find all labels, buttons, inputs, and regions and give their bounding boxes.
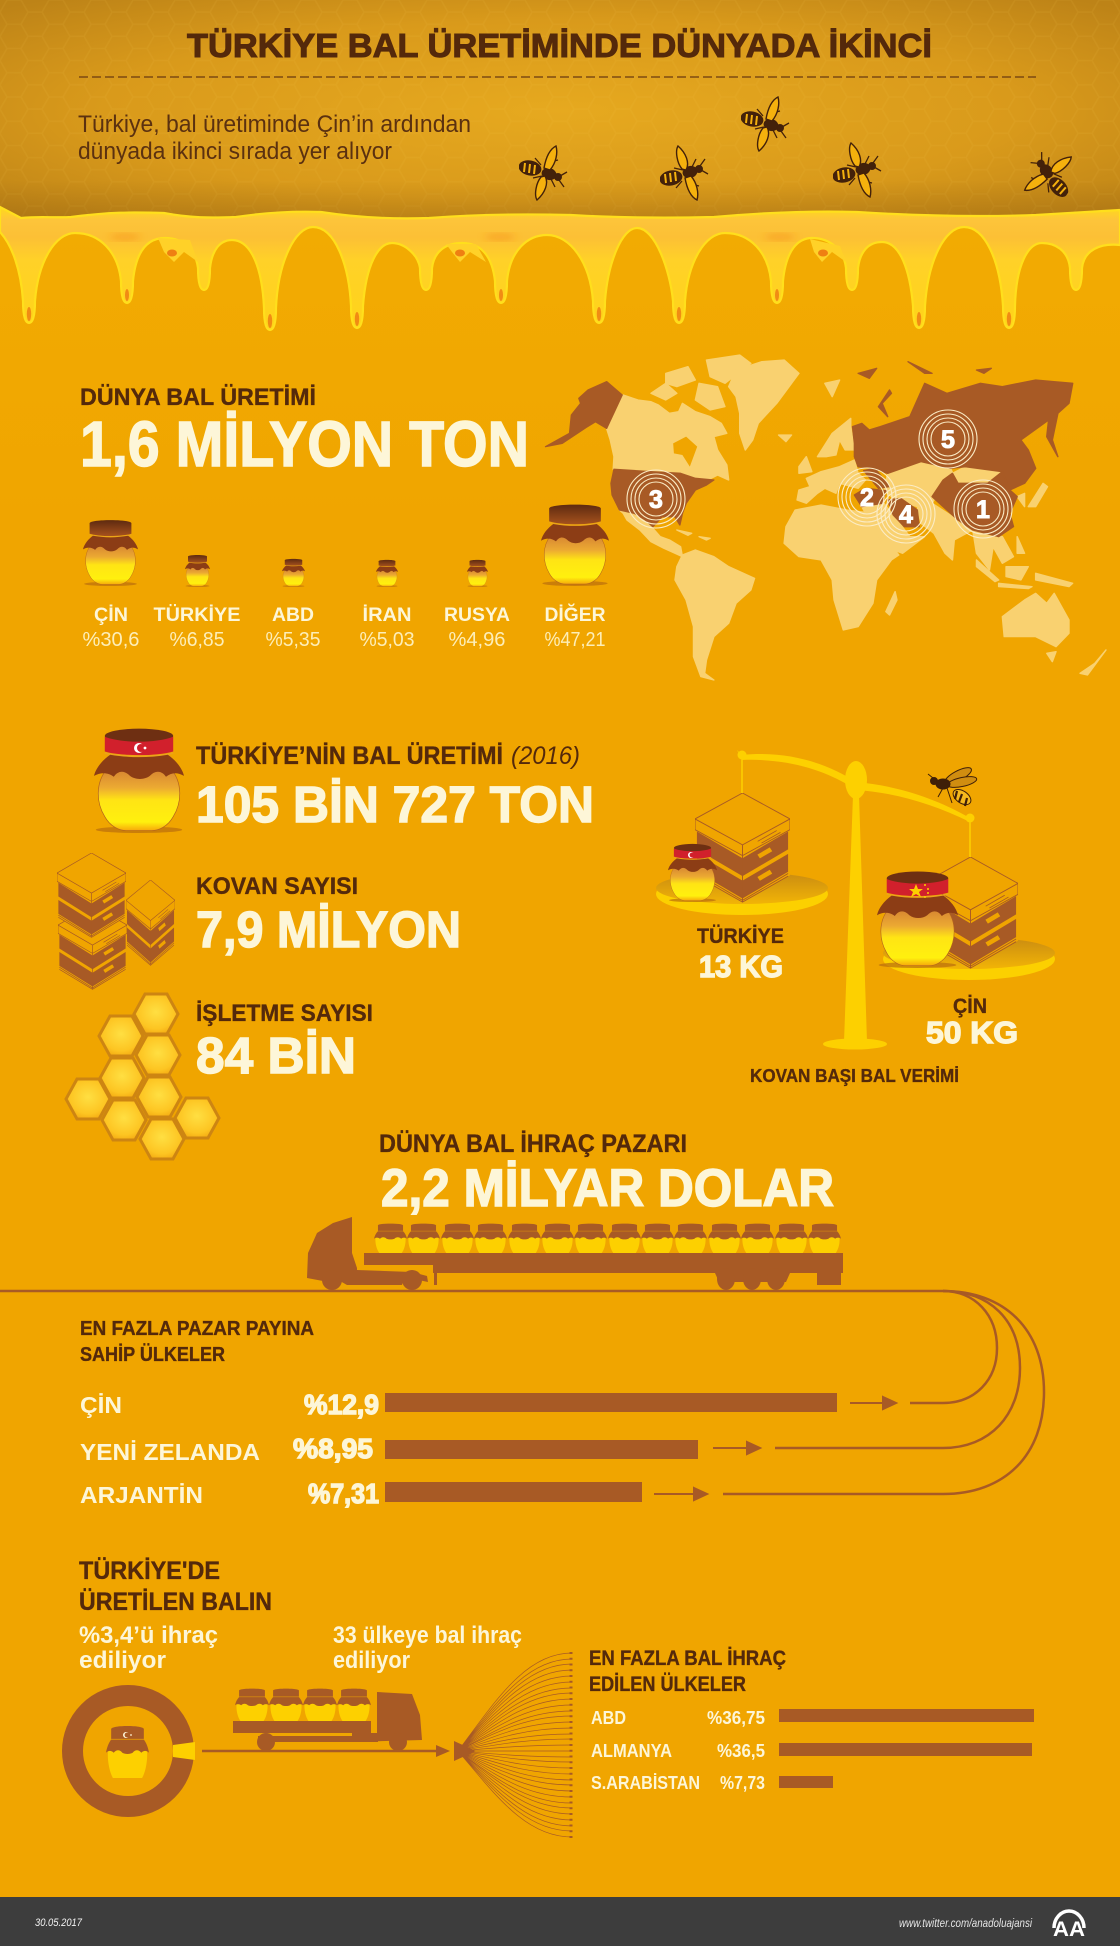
jars on trailer xyxy=(374,1224,841,1253)
arrow to fan xyxy=(202,1745,450,1757)
ring: 5 Rusya xyxy=(919,410,977,468)
balance scale xyxy=(656,750,1055,1050)
heading: Turkish honey: ÜRETİLEN BALIN xyxy=(79,1587,272,1616)
jar labels and percentages: %5,35 xyxy=(266,629,320,651)
rank numbers: 1 xyxy=(976,496,990,524)
row: Almanya: ALMANYA xyxy=(591,1741,672,1761)
callout: export share: %3,4’ü ihraç xyxy=(79,1622,218,1649)
logo: AA: AA xyxy=(1053,1918,1085,1941)
fan of export lines xyxy=(454,1652,572,1839)
callout: export share xyxy=(79,1622,218,1674)
right hive xyxy=(923,857,1018,968)
row: Yeni Zelanda xyxy=(80,1433,760,1465)
jar labels and percentages: %47,21 xyxy=(544,629,606,651)
left pan xyxy=(656,872,828,915)
row: Arjantin: ARJANTİN xyxy=(80,1482,203,1508)
Türkiye production heading: TÜRKİYE’NİN BAL ÜRETİMİ xyxy=(196,741,503,770)
row: S.Arabistan: S.ARABİSTAN xyxy=(591,1773,700,1793)
subtitle text: dünyada ikinci sırada yer alıyor xyxy=(78,138,392,165)
date: 30.05.2017 xyxy=(35,1917,83,1929)
bar chart: market share xyxy=(80,1389,896,1509)
rank numbers: 2 xyxy=(860,484,874,512)
big number: 1.6 million tons: 1,6 MİLYON TON xyxy=(80,408,529,480)
side droplets xyxy=(158,238,846,262)
scale labels: KOVAN BAŞI BAL VERİMİ xyxy=(750,1066,959,1086)
business count label: İŞLETME SAYISI xyxy=(196,1000,373,1027)
callout: 33 countries xyxy=(333,1622,522,1674)
row: Çin xyxy=(80,1389,896,1420)
heading: top market share: SAHİP ÜLKELER xyxy=(80,1343,225,1366)
bar chart: export destinations xyxy=(591,1708,1034,1793)
rank numbers xyxy=(649,426,990,529)
heading: top export destinations: EN FAZLA BAL İHRAÇ xyxy=(589,1647,786,1670)
rank numbers: 3 xyxy=(649,486,663,514)
rank numbers: 4 xyxy=(899,501,913,529)
row: ABD xyxy=(591,1708,1034,1728)
jar labels and percentages: %4,96 xyxy=(448,629,506,651)
world map xyxy=(546,355,1106,680)
right pan xyxy=(883,937,1055,980)
scale labels: 13 KG xyxy=(699,949,783,984)
jars: production share xyxy=(83,505,609,587)
icon: bee on beam xyxy=(928,765,978,808)
scale labels: 50 KG xyxy=(926,1015,1018,1050)
row: Çin: %12,9 xyxy=(304,1389,379,1420)
heading: top export destinations xyxy=(589,1647,786,1696)
row: ABD: %36,75 xyxy=(707,1708,765,1728)
scale labels: TÜRKİYE xyxy=(697,925,784,948)
callout: export share: ediliyor xyxy=(79,1647,166,1674)
row: ABD: ABD xyxy=(591,1708,626,1728)
icon: honeycomb cells xyxy=(66,994,219,1159)
heading: Turkish honey xyxy=(79,1556,272,1616)
jar labels and percentages: %30,6 xyxy=(82,629,140,651)
small truck with jars xyxy=(233,1689,422,1751)
jar labels and percentages: TÜRKİYE xyxy=(154,605,240,626)
row: S.Arabistan: %7,73 xyxy=(720,1773,765,1793)
jar labels and percentages xyxy=(82,604,606,651)
panel: header honeycomb band xyxy=(0,0,1120,222)
honey drips xyxy=(0,207,1120,330)
scale labels: ÇİN xyxy=(953,995,987,1018)
row: Arjantin: %7,31 xyxy=(308,1478,379,1509)
jar labels and percentages: %5,03 xyxy=(360,629,414,651)
hive count label: KOVAN SAYISI xyxy=(196,873,358,900)
Türkiye production heading: (2016) xyxy=(511,742,580,770)
subtitle text xyxy=(78,111,471,165)
row: S.Arabistan xyxy=(591,1773,833,1793)
orange drip tips xyxy=(27,289,1011,328)
footer xyxy=(0,1897,1120,1946)
flow lines from road to bars xyxy=(0,1291,1044,1494)
row: Yeni Zelanda: %8,95 xyxy=(293,1433,373,1464)
row: Almanya xyxy=(591,1741,1032,1761)
row: Çin: ÇİN xyxy=(80,1392,122,1418)
subtitle text: Türkiye, bal üretiminde Çin’in ardından xyxy=(78,111,471,138)
rank numbers: 5 xyxy=(941,426,955,454)
icon: Turkish jar xyxy=(94,729,184,833)
heading: Turkish honey: TÜRKİYE'DE xyxy=(79,1556,220,1585)
donut chart: export share xyxy=(72,1696,195,1806)
row: Yeni Zelanda: YENİ ZELANDA xyxy=(80,1439,260,1465)
jar labels and percentages: ABD xyxy=(272,605,314,626)
truck with jars xyxy=(307,1217,843,1290)
ring: 3 ABD xyxy=(627,470,685,528)
ring: 2 Türkiye xyxy=(838,468,896,526)
heading: world production: DÜNYA BAL ÜRETİMİ xyxy=(80,384,316,411)
row: Arjantin xyxy=(80,1478,707,1509)
big number: export market: 2,2 MİLYAR DOLAR xyxy=(381,1159,834,1218)
brown producer countries xyxy=(546,362,1073,537)
heading: top export destinations: EDİLEN ÜLKELER xyxy=(589,1673,746,1696)
jar labels and percentages: DİĞER xyxy=(544,604,606,626)
big number: business count: 84 BİN xyxy=(196,1027,356,1084)
left jar with Turkish band xyxy=(668,844,717,902)
callout: 33 countries: 33 ülkeye bal ihraç xyxy=(333,1622,522,1649)
big number: production: 105 BİN 727 TON xyxy=(196,776,594,833)
light land masses xyxy=(607,355,1106,680)
title: TÜRKİYE BAL ÜRETİMİNDE DÜNYADA İKİNCİ xyxy=(187,27,932,64)
ring: 1 Çin xyxy=(954,480,1012,538)
heading: export market: DÜNYA BAL İHRAÇ PAZARI xyxy=(379,1129,687,1158)
ring: 4 İran xyxy=(877,485,935,543)
row: Almanya: %36,5 xyxy=(717,1741,765,1761)
right jar with Chinese band xyxy=(877,872,958,968)
twitter url: www.twitter.com/anadoluajansi xyxy=(899,1916,1032,1930)
scale labels xyxy=(697,925,1018,1086)
left hive xyxy=(695,793,790,902)
heading: top market share: EN FAZLA PAZAR PAYINA xyxy=(80,1318,314,1340)
jar labels and percentages: %6,85 xyxy=(170,629,224,651)
heading: top market share xyxy=(80,1318,314,1366)
jar labels and percentages: İRAN xyxy=(362,605,412,626)
callout: 33 countries: ediliyor xyxy=(333,1647,410,1674)
icon: jar silhouette xyxy=(106,1726,149,1778)
jar labels and percentages: ÇİN xyxy=(94,605,128,626)
icon: beehives xyxy=(57,853,175,989)
jar labels and percentages: RUSYA xyxy=(444,605,510,626)
icon: bees xyxy=(518,97,1087,212)
big number: hive count: 7,9 MİLYON xyxy=(196,901,461,958)
